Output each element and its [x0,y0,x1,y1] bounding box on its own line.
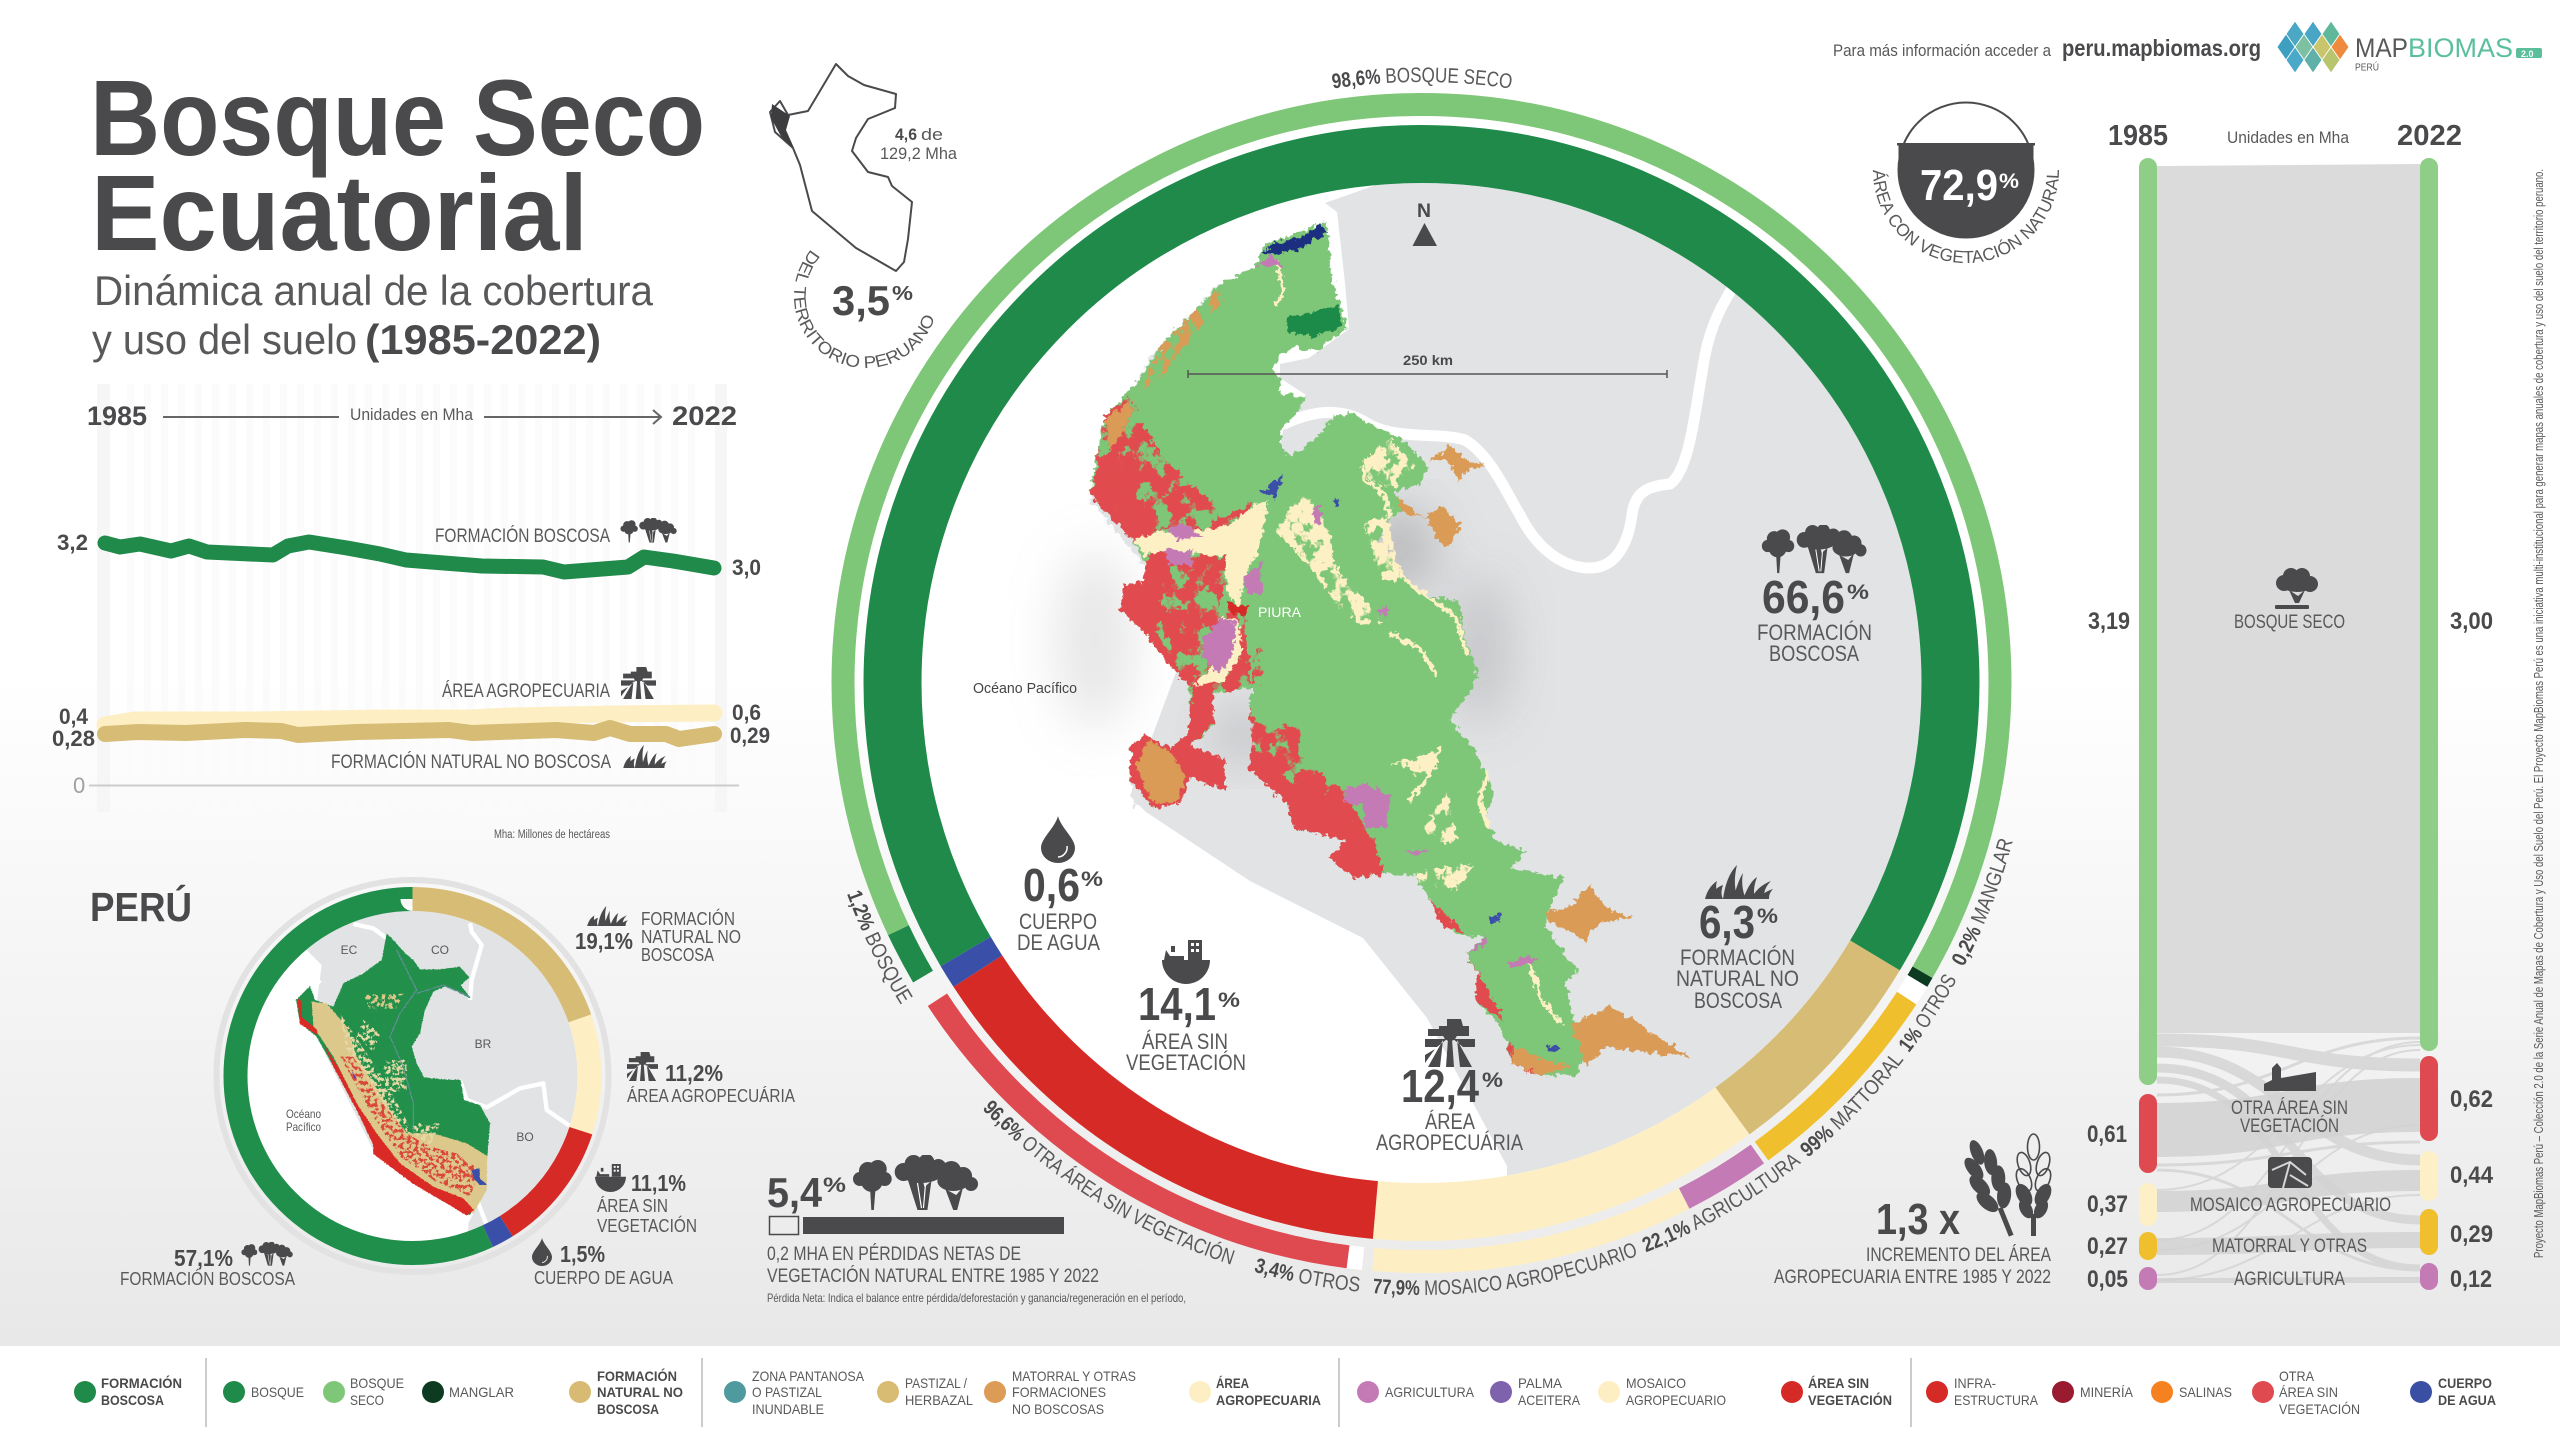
legend: cuerpo de agua [2410,1375,2496,1408]
legend: área agropecuaria: ÁREA [1216,1375,1249,1391]
legend: palma aceitera [1490,1375,1581,1408]
loss description: VEGETACIÓN NATURAL ENTRE 1985 Y 2022 [767,1265,1099,1287]
label: agricultura: AGRICULTURA [2234,1269,2345,1290]
chart value labels: 0,28 [52,726,95,751]
subtitle: Dinámica anual de la cobertura [94,267,654,314]
legend: área agropecuaria: AGROPECUARIA [1216,1392,1321,1408]
legend: salinas [2151,1381,2232,1403]
legend: cuerpo de agua: CUERPO [2438,1375,2492,1391]
map: mottled otra área sin vegetación [1096,394,1384,875]
Perú label: área sin vegetación 11,1%: 11,1% [631,1170,686,1196]
label: otra área sin vegetación [2231,1063,2348,1137]
sankey header [2108,120,2462,152]
label: otra área sin vegetación: OTRA ÁREA SIN [2231,1098,2348,1119]
legend: zona pantanosa: ZONA PANTANOSA [752,1368,865,1384]
legend: área sin vegetación [1781,1375,1892,1408]
label: bosque seco: BOSQUE SECO [2234,612,2345,633]
subtitle: y uso del suelo [92,316,357,363]
Perú label: formación natural 19,1%: 19,1% [575,928,633,954]
stat: cuerpo de agua 0,6% [1017,816,1103,955]
net loss stat 5,4% [767,1154,1186,1305]
legend: bosque: BOSQUE [251,1384,304,1400]
loss description [767,1244,1186,1305]
legend: matorral [984,1368,1136,1417]
values 1985: 0,27 [2087,1233,2128,1260]
label: matorral y otras: MATORRAL Y OTRAS [2212,1236,2367,1257]
map place names: BR [475,1037,492,1051]
values 2022: 0,29 [2450,1221,2493,1248]
legend: zona pantanosa: INUNDABLE [752,1401,824,1417]
logo: MapBiomas [2277,21,2542,74]
main circle: Bosque Seco Ecuatorial [832,67,2040,1298]
chart value labels: 0,4 [59,704,89,729]
nodes 2022 [2420,158,2438,1290]
values 1985: 0,61 [2087,1121,2127,1148]
increase stat 1,3 x [1774,1132,2055,1288]
legend [74,1358,2496,1427]
values 1985: 3,19 [2088,608,2130,635]
values 2022 [2450,608,2494,1293]
territory percent: % [892,283,913,305]
stat: formación natural 6,3% [1676,865,1799,1013]
legend: otra área sin vegetación: VEGETACIÓN [2279,1401,2360,1417]
map place labels: PIURA [1258,604,1302,620]
line: formación natural no boscosa [105,728,714,739]
Perú label: área agropecuaria 11,2%: ÁREA AGROPECUÁRIA [627,1086,795,1106]
values 2022: 0,12 [2450,1266,2492,1293]
legend: manglar: MANGLAR [449,1384,514,1400]
territory area text: 4,6 [895,125,917,144]
legend: agricultura: AGRICULTURA [1385,1384,1475,1400]
Perú label: formación natural 19,1%: NATURAL NO [641,927,741,947]
map: bosque seco base [1090,221,1590,1075]
stat: formación boscosa 66,6% [1757,524,1872,666]
legend: zona pantanosa [724,1368,865,1417]
chart header: 1985 [87,401,147,431]
values 1985 [2087,608,2130,1293]
curved ring labels [847,67,2013,1298]
Perú label: área agropecuaria 11,2%: 11,2% [665,1060,723,1086]
chart value labels: 0,6 [732,700,761,725]
series label: formación boscosa [435,518,677,547]
legend: área sin vegetación: ÁREA SIN [1808,1375,1869,1391]
header link: peru.mapbiomas.org [2062,35,2261,61]
flow: bosque seco [2157,164,2420,1033]
map place names: BO [516,1130,534,1144]
Perú donut with map [216,870,633,1272]
stat: área sin vegetación 14,1%: % [1218,989,1240,1012]
legend: área agropecuaria [1189,1375,1321,1408]
logo: MapBiomas: 2.0 [2521,49,2534,59]
icon: wheat [1952,1132,2055,1244]
white border river [1284,275,1740,568]
curved ring labels: 1,2% BOSQUE [847,890,913,1004]
stat: formación natural 6,3%: FORMACIÓN [1680,945,1795,970]
stat: área agropecuaria 12,4%: % [1482,1069,1503,1092]
map: orange shrub formations [1135,445,1692,1075]
legend: pastizal: PASTIZAL / [905,1375,967,1391]
stat: área con vegetación natural 72,9% [1872,102,2060,264]
stat: área agropecuaria 12,4% [1376,1019,1523,1155]
map: agriculture patches [1164,256,1537,969]
curved label: ÁREA CON VEGETACIÓN NATURAL [1872,170,2060,264]
Perú label: formación boscosa 57,1% [120,1242,295,1289]
territory share: Peru outline [769,63,958,368]
stat: área agropecuaria 12,4%: AGROPECUÁRIA [1376,1130,1523,1155]
title [90,57,705,273]
Perú label: área agropecuaria 11,2% [627,1052,795,1106]
legend: matorral: MATORRAL Y OTRAS [1012,1368,1136,1384]
Perú label: formación boscosa 57,1%: FORMACIÓN BOSCOSA [120,1268,295,1289]
Perú label: área sin vegetación 11,1%: ÁREA SIN [597,1196,668,1216]
curved ring labels: 99% MATTORAL [1800,1056,1904,1156]
donut segments [236,899,590,1253]
legend: pastizal [877,1375,973,1408]
stat: formación boscosa 66,6%: FORMACIÓN [1757,620,1872,645]
legend: matorral: NO BOSCOSAS [1012,1401,1104,1417]
title: Bosque Seco [90,57,705,178]
legend: bosque [223,1381,304,1403]
legend: formación boscosa: BOSCOSA [101,1392,164,1408]
map place labels: Océano Pacífico [973,680,1077,697]
header link [1833,35,2261,61]
legend: área sin vegetación: VEGETACIÓN [1808,1391,1892,1408]
legend: pastizal: HERBAZAL [905,1392,973,1408]
logo: MapBiomas: MAP [2355,33,2408,63]
map place names: Océano [286,1107,321,1121]
legend: agricultura [1357,1381,1475,1403]
map place names [286,943,534,1144]
stat: área sin vegetación 14,1%: VEGETACIÓN [1126,1050,1246,1075]
Perú label: cuerpo de agua 1,5%: 1,5% [560,1241,605,1267]
stat: área agropecuaria 12,4%: ÁREA [1425,1109,1475,1134]
increase description [1774,1245,2051,1288]
stat: área sin vegetación 14,1%: 14,1 [1138,978,1216,1030]
chart value labels [52,530,770,751]
curved ring labels: 98,6% BOSQUE SECO [1332,67,1512,90]
legend: infraestructura: ESTRUCTURA [1954,1392,2039,1408]
stat: cuerpo de agua 0,6%: % [1081,868,1103,891]
legend: otra área sin vegetación [2252,1368,2360,1417]
stat: formación natural 6,3%: NATURAL NO [1676,966,1799,991]
territory area text: de [921,125,943,144]
map: agricultural mosaic [1133,501,1269,685]
sankey header: Unidades en Mha [2227,128,2349,147]
stat: formación natural 6,3%: 6,3 [1699,896,1755,948]
stat: área agropecuaria 12,4%: 12,4 [1401,1060,1479,1112]
map place names: Pacífico [286,1120,321,1134]
flows: transitions [2157,1038,2420,1283]
legend: bosque seco [323,1375,404,1408]
legend: manglar [422,1381,514,1403]
legend: minería: MINERÍA [2080,1384,2134,1400]
Perú label: área sin vegetación 11,1% [595,1164,697,1236]
legend: zona pantanosa: O PASTIZAL [752,1384,822,1400]
values 2022: 0,44 [2450,1162,2494,1189]
main map [1046,183,1922,1176]
series label: área agropecuaria: ÁREA AGROPECUARIA [442,681,610,702]
curved ring labels: 1% OTROS [1900,974,1956,1052]
territory percent: 3,5 [832,277,890,324]
increase description: INCREMENTO DEL ÁREA [1866,1245,2051,1266]
legend: matorral: FORMACIONES [1012,1384,1106,1400]
scale bar [1188,352,1667,378]
values 1985: 0,37 [2087,1191,2128,1218]
Perú label: cuerpo de agua 1,5% [532,1238,673,1288]
label: mosaico agropecuario: MOSAICO AGROPECUARIO [2190,1195,2391,1216]
stat: área con vegetación natural 72,9%: % [1999,170,2019,193]
net loss stat 5,4%: % [823,1174,846,1197]
territory area text: 129,2 Mha [880,144,958,163]
series label: formación natural: FORMACIÓN NATURAL NO BOSCOSA [331,751,611,773]
series label: área agropecuaria [442,667,656,702]
series label: formación boscosa: FORMACIÓN BOSCOSA [435,525,610,547]
Perú map [296,911,578,1231]
Perú label: formación boscosa 57,1%: 57,1% [174,1245,233,1271]
legend: bosque seco: SECO [350,1392,384,1408]
legend: formación natural no boscosa: FORMACIÓN [597,1367,677,1384]
Perú label: formación natural 19,1%: BOSCOSA [641,945,714,965]
values 2022: 0,62 [2450,1086,2493,1113]
scale bar: 250 km [1403,352,1453,368]
stat: cuerpo de agua 0,6%: 0,6 [1023,859,1080,911]
label: otra área sin vegetación: VEGETACIÓN [2240,1115,2339,1137]
legend: cuerpo de agua: DE AGUA [2438,1392,2496,1408]
legend: mosaico agropecuario: AGROPECUARIO [1626,1392,1726,1408]
legend: otra área sin vegetación: OTRA [2279,1368,2315,1384]
line chart: temporal dynamics [52,384,770,841]
legend: formación natural no boscosa: BOSCOSA [597,1401,659,1417]
loss description: Pérdida Neta: Indica el balance entre pérdida/deforestación y ganancia/regeneración en el período, [767,1291,1186,1305]
legend: formación natural no boscosa: NATURAL NO [597,1384,683,1400]
curved ring labels: 22,1% AGRICULTURA [1642,1154,1802,1252]
line: área agropecuaria [105,713,714,725]
label: mosaico agropecuario [2190,1157,2391,1216]
icon: dry forest location [771,104,794,148]
stat: área con vegetación natural 72,9%: 72,9 [1920,161,1998,210]
legend: bosque seco: BOSQUE [350,1375,404,1391]
chart header: Unidades en Mha [350,405,473,424]
curved ring labels: 3,4% OTROS [1254,1258,1360,1292]
stat: cuerpo de agua 0,6%: CUERPO [1019,909,1097,934]
chart header: 2022 [672,401,737,431]
increase stat 1,3 x: 1,3 x [1876,1195,1960,1244]
header link: Para más información acceder a [1833,41,2051,60]
curved ring labels: 77,9% MOSAICO AGROPECUARIO [1374,1243,1636,1298]
chart value labels: 3,2 [57,530,88,555]
territory area text [880,125,958,163]
nodes 1985 [2139,158,2157,1290]
increase description: AGROPECUARIA ENTRE 1985 Y 2022 [1774,1267,2051,1288]
legend: salinas: SALINAS [2179,1384,2232,1400]
title: Ecuatorial [91,152,588,273]
chart header [87,401,737,431]
north arrow: N [1417,201,1431,222]
legend: mosaico agropecuario: MOSAICO [1626,1375,1686,1391]
label: bosque seco [2234,568,2345,633]
Perú label: formación natural 19,1%: FORMACIÓN [641,908,735,929]
map place names: EC [341,943,358,957]
subtitle: (1985-2022) [365,316,601,363]
icon: trees [853,1154,978,1210]
loss proportion bar [770,1216,1064,1234]
heading: Perú: PERÚ [90,884,192,930]
map place labels [973,604,1302,697]
values 1985: 0,05 [2087,1266,2128,1293]
legend: palma aceitera: ACEITERA [1518,1392,1581,1408]
legend: infraestructura: INFRA- [1954,1375,1996,1391]
sankey chart [2087,120,2494,1293]
ring: land cover classes [892,154,1950,1212]
legend: formación boscosa [74,1374,182,1408]
legend: mosaico agropecuario [1598,1375,1726,1408]
sankey header: 2022 [2397,120,2462,152]
legend: otra área sin vegetación: ÁREA SIN [2279,1384,2338,1400]
map place names: CO [431,943,449,957]
axis baseline: 0 [73,773,85,798]
stat: formación natural 6,3%: BOSCOSA [1694,988,1782,1013]
north arrow [1412,201,1437,246]
legend: formación natural no boscosa [569,1367,683,1417]
curved ring labels: 0,2% MANGLAR [1952,839,2013,965]
chart value labels: 0,29 [730,723,770,748]
stat: área sin vegetación 14,1% [1126,940,1246,1075]
subtitle [92,267,654,363]
line: formación boscosa [105,542,714,572]
stat: formación boscosa 66,6%: % [1847,581,1869,604]
loss description: 0,2 MHA EN PÉRDIDAS NETAS DE [767,1244,1021,1265]
curved label: del territorio peruano: DEL TERRITORIO PERUANO [794,250,934,368]
logo: MapBiomas: PERÚ [2355,60,2379,74]
stat: área sin vegetación 14,1%: ÁREA SIN [1142,1029,1228,1054]
Perú label: área sin vegetación 11,1%: VEGETACIÓN [597,1215,697,1236]
legend: formación boscosa: FORMACIÓN [101,1374,182,1391]
stat: formación boscosa 66,6%: 66,6 [1762,571,1845,623]
stat: formación natural 6,3%: % [1757,905,1778,928]
legend: palma aceitera: PALMA [1518,1375,1563,1391]
legend: minería [2052,1381,2134,1403]
map: infrastructure and water [1227,223,1562,1051]
Perú label: formación natural 19,1% [575,906,741,965]
stat: cuerpo de agua 0,6%: DE AGUA [1017,930,1100,955]
curved ring labels: 96,6% OTRA ÁREA SIN VEGETACIÓN [984,1100,1235,1264]
values 2022: 3,00 [2450,608,2493,635]
ring: sub-classes [843,104,2000,1262]
sankey header: 1985 [2108,120,2168,152]
legend: infraestructura [1926,1375,2039,1408]
map: solid red coast [1090,450,1537,1075]
stat: formación boscosa 66,6%: BOSCOSA [1769,641,1859,666]
chart value labels: 3,0 [732,555,761,580]
Perú label: cuerpo de agua 1,5%: CUERPO DE AGUA [534,1268,673,1288]
icon: Peru outline map [770,64,912,271]
logo: MapBiomas: BIOMAS [2408,33,2513,63]
chart footnote: Mha: Millones de hectáreas [494,829,610,841]
net loss stat 5,4%: 5,4 [767,1169,823,1216]
